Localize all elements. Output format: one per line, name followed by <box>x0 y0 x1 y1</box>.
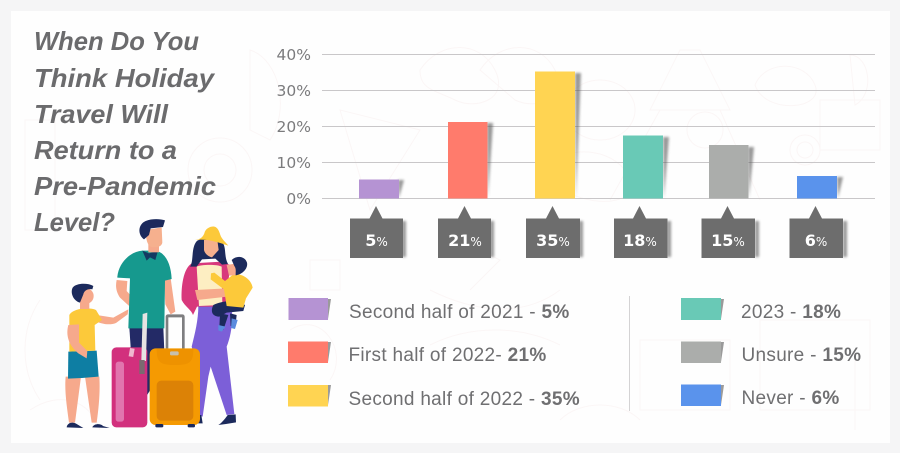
title: Level? <box>34 207 115 237</box>
legend item: 2023 <box>681 298 841 323</box>
woman's child <box>211 257 253 332</box>
legend item: 2023: 2023 - 18% <box>741 302 841 323</box>
legend: left column <box>288 298 580 410</box>
callout: 35%: 35% <box>536 231 570 250</box>
callout: 5%: 5% <box>365 231 388 250</box>
illustration: travelling family <box>65 219 253 428</box>
woman <box>182 227 253 425</box>
legend item: never <box>681 384 840 409</box>
bar shadows <box>398 73 843 198</box>
legend item: second half of 2021: Second half of 2021 - 5% <box>349 302 570 323</box>
title: Travel Will <box>34 99 169 129</box>
callout: 18%: 18% <box>623 231 657 250</box>
callout: 15%: 15% <box>711 231 745 250</box>
bar: 2023 <box>623 136 663 198</box>
callout: 15% <box>702 206 755 258</box>
axis labels: 10% <box>277 154 311 172</box>
title: Return to a <box>34 135 177 165</box>
legend swatch shadows <box>721 299 724 405</box>
legend: right column <box>681 298 861 409</box>
callout: 35% <box>526 206 580 258</box>
title <box>34 26 217 237</box>
callout: 21%: 21% <box>448 231 482 250</box>
bar: never <box>797 176 837 198</box>
bar: unsure <box>709 145 748 198</box>
callout: 21% <box>438 206 491 258</box>
bar chart <box>277 46 875 208</box>
callout: 6%: 6% <box>805 231 827 250</box>
callout: 5% <box>350 206 403 258</box>
axis labels: 0% <box>286 190 311 208</box>
legend item: first half of 2022 <box>288 342 547 366</box>
axis labels: 20% <box>277 118 311 136</box>
legend item: first half of 2022: First half of 2022- 21% <box>348 345 547 366</box>
legend swatch shadows <box>328 299 331 405</box>
title: When Do You <box>34 26 199 56</box>
callout: 18% <box>614 206 668 258</box>
boy <box>65 284 128 428</box>
legend item: unsure: Unsure - 15% <box>742 345 861 366</box>
grey suitcase handle <box>166 314 185 349</box>
axis labels <box>277 46 311 208</box>
legend item: unsure <box>681 342 861 366</box>
legend item: second half of 2021 <box>288 298 570 323</box>
title: Think Holiday <box>34 63 216 93</box>
man <box>116 219 175 396</box>
legend item: second half of 2022: Second half of 2022 - 35% <box>348 389 580 410</box>
callout shadows <box>402 221 847 257</box>
bar: second half of 2021 <box>359 180 399 198</box>
axis labels: 40% <box>277 46 311 64</box>
legend item: second half of 2022 <box>288 385 580 410</box>
bar: second half of 2022 <box>535 72 575 198</box>
legend item: never: Never - 6% <box>742 388 840 409</box>
callout: 6% <box>790 206 843 258</box>
bar: first half of 2022 <box>448 122 488 198</box>
axis labels: 30% <box>277 82 311 100</box>
orange suitcase <box>150 348 200 427</box>
pink suitcase <box>112 313 147 427</box>
title: Pre-Pandemic <box>34 171 217 201</box>
